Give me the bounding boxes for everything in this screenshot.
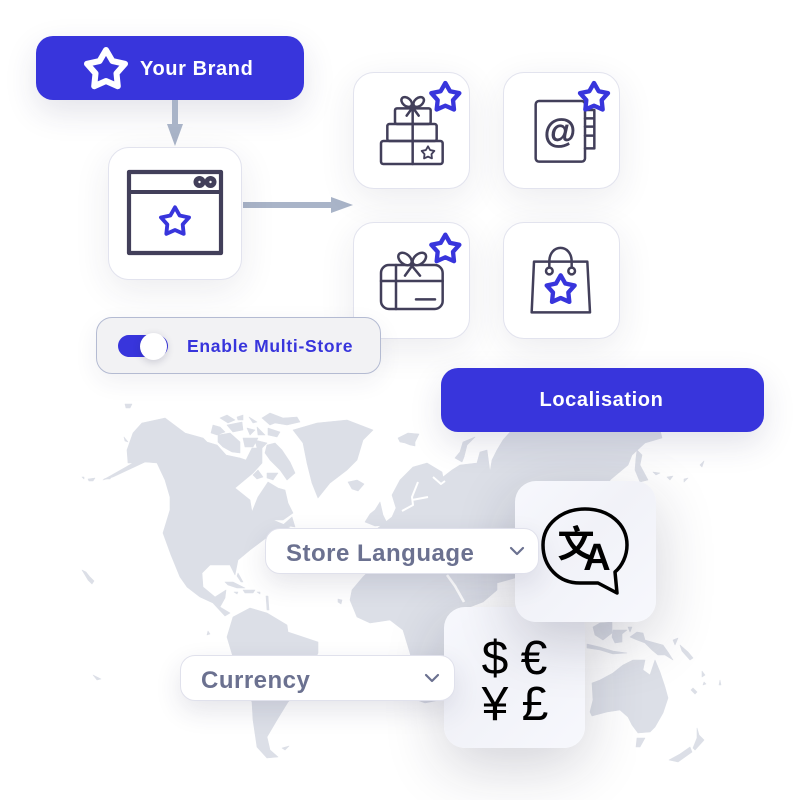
- currency dropdown: [180, 655, 455, 701]
- icon: currency symbols: €: [521, 632, 548, 685]
- localisation header pill: Localisation: [540, 389, 663, 411]
- Caribbean islands: [225, 573, 269, 610]
- dropdown label: Currency: [201, 667, 310, 694]
- icon: chevron: [424, 674, 440, 682]
- Arctic islands: [211, 413, 300, 527]
- Indonesia and Oceania islands: [587, 622, 721, 694]
- inland seas: [402, 477, 464, 602]
- icon: stacked gifts: [380, 80, 462, 166]
- Eurasia and Africa: [350, 430, 662, 703]
- South America: [227, 608, 318, 758]
- Novaya Zemlya: [455, 437, 475, 462]
- Greenland: [293, 420, 373, 498]
- icon: address book: @: [543, 113, 577, 150]
- toggle label: Enable Multi-Store: [187, 336, 353, 356]
- icon: currency symbols: $: [482, 632, 508, 685]
- panel: translate card: [515, 481, 656, 622]
- North America: [103, 418, 293, 616]
- icon: translate speech bubble: [541, 507, 629, 595]
- East Asia islands: [635, 450, 704, 482]
- icon: currency symbols: [481, 632, 548, 731]
- dropdown label: Store Language: [286, 540, 474, 567]
- arrow: store window to store types: [243, 197, 353, 213]
- your brand header pill: [36, 36, 304, 100]
- icon: brand star: [84, 47, 128, 90]
- icon: gift card: [380, 232, 462, 310]
- brand label: Your Brand: [140, 58, 253, 80]
- toggle switch: [118, 335, 168, 357]
- toggle panel: enable multi-store: [96, 317, 381, 374]
- Pacific and Atlantic small islands: [82, 404, 342, 750]
- Iceland: [348, 480, 364, 491]
- icon: chevron: [510, 546, 524, 556]
- Tasmania: [636, 738, 645, 747]
- localisation header pill: [441, 368, 764, 432]
- Australia: [590, 660, 668, 733]
- icon: currency symbols: ¥: [481, 678, 509, 731]
- panel: currency symbols card: [444, 607, 585, 748]
- panel: address book store: [503, 72, 620, 189]
- icon: address book: [534, 80, 610, 163]
- United Kingdom and Ireland: [365, 502, 388, 526]
- icon: browser window: [126, 170, 224, 256]
- store language dropdown: [265, 528, 539, 574]
- panel: shopping bag store: [503, 222, 620, 339]
- toggle knob: [140, 333, 167, 360]
- panel: store window: [108, 147, 242, 280]
- icon: shopping bag: [530, 246, 592, 314]
- panel: gift card store: [353, 222, 470, 339]
- icon: translate speech bubble: 文: [558, 514, 594, 568]
- New Zealand: [669, 728, 704, 762]
- panel: gift boxes store: [353, 72, 470, 189]
- icon: translate speech bubble: A: [583, 537, 611, 579]
- icon: currency symbols: £: [522, 678, 548, 731]
- Svalbard: [398, 433, 419, 446]
- arrow: brand down to store window: [167, 100, 183, 146]
